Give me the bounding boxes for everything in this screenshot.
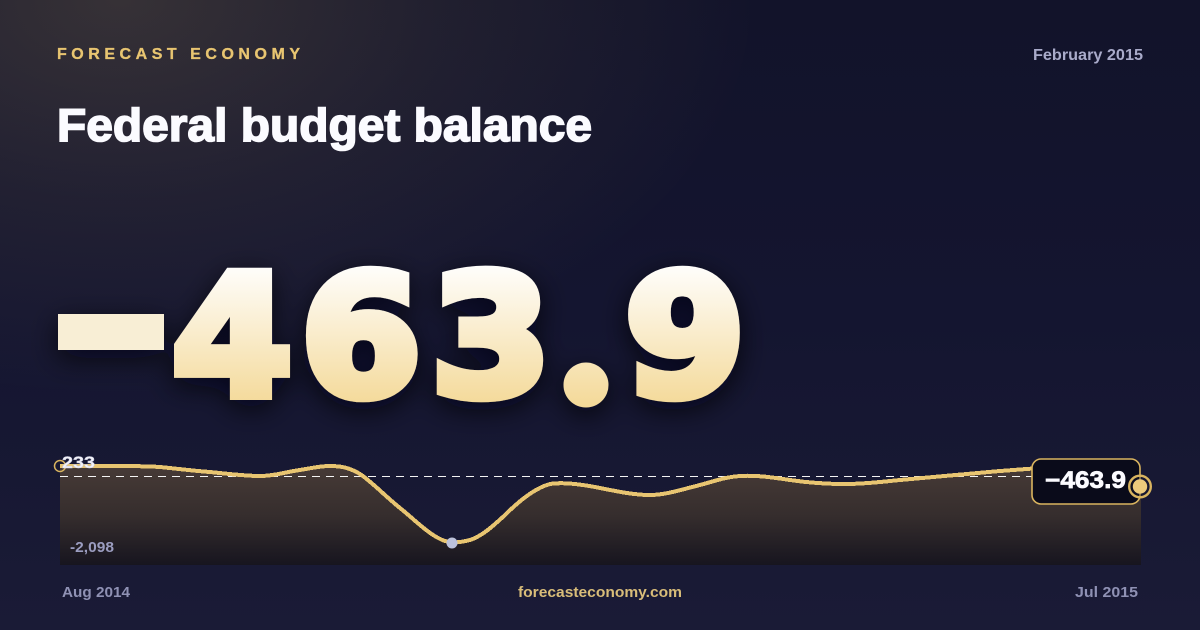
chart line: [60, 466, 1040, 542]
current value callout: [1032, 459, 1140, 504]
big value: .: [546, 241, 612, 435]
footer: end date: Jul 2015: [1075, 585, 1138, 601]
max label: 233: [62, 453, 95, 472]
current value callout: −463.9: [1045, 467, 1126, 494]
chart area fill: [60, 466, 1141, 565]
start marker: [54, 460, 66, 472]
big value: [58, 241, 745, 435]
zero reference line: [60, 476, 1032, 478]
big value: 9: [625, 241, 745, 435]
big value: −: [62, 241, 207, 435]
end marker: [1129, 476, 1151, 497]
date: February 2015: [1033, 47, 1143, 64]
footer: start date: Aug 2014: [62, 585, 130, 601]
chart: budget balance sparkline: [54, 453, 1151, 565]
footer: site: forecasteconomy.com: [518, 585, 682, 601]
big value: 463: [172, 241, 551, 435]
brand label: FORECAST ECONOMY: [57, 46, 300, 63]
minimum marker: [446, 538, 458, 548]
title: Federal budget balance: [57, 99, 592, 151]
min label: -2,098: [70, 540, 114, 556]
